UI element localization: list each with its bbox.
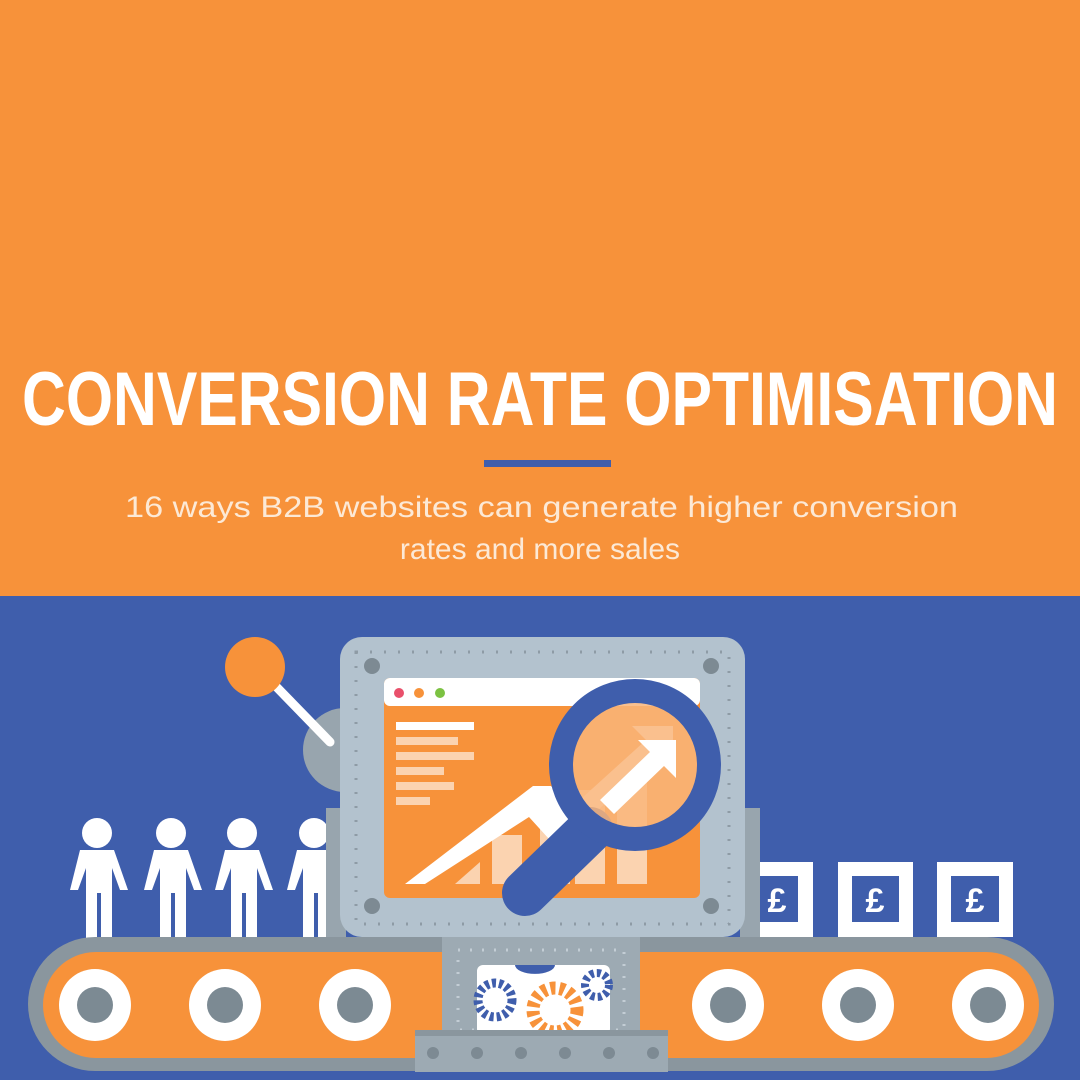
panel: orange header background [0, 0, 1080, 596]
screen [384, 678, 700, 898]
pound boxes [760, 862, 1013, 937]
chart bars [455, 770, 647, 884]
monitor [0, 0, 745, 937]
subtitle: rates and more sales [400, 533, 680, 566]
machine lower gearbox [415, 937, 668, 1072]
subtitle [125, 491, 958, 566]
pound boxes: £ [966, 882, 985, 920]
chart arrow [0, 0, 547, 884]
pound boxes: £ [866, 882, 885, 920]
subtitle: 16 ways B2B websites can generate higher conversion [125, 491, 958, 524]
conveyor belt [28, 937, 1054, 1071]
people on conveyor [70, 818, 345, 938]
machine side panels [326, 808, 760, 938]
icon: lever [225, 637, 387, 792]
divider: blue underline [484, 460, 611, 467]
panel: blue illustration background [0, 596, 1080, 1080]
icon: magnifier [525, 691, 709, 893]
icon: gears [478, 965, 609, 1032]
pound boxes: £ [768, 882, 787, 920]
